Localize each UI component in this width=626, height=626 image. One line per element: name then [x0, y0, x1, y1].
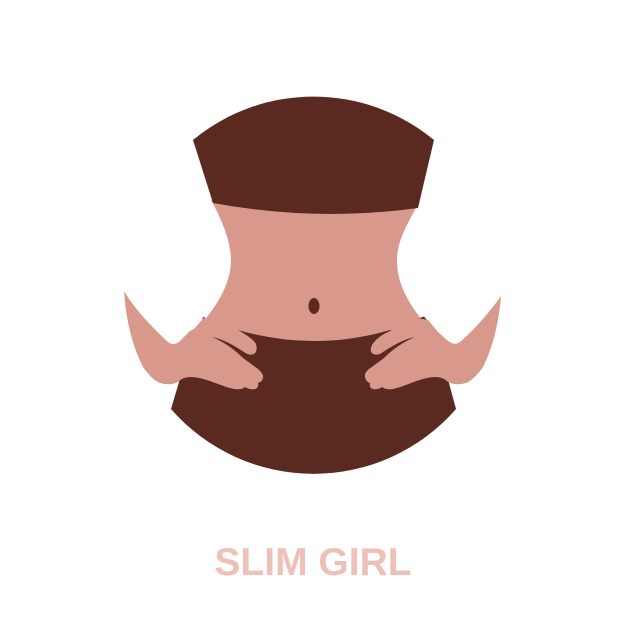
icon: right hand [365, 296, 501, 389]
icon: waist skin [203, 200, 422, 345]
icon: navel [308, 298, 320, 314]
icon: left hand [124, 291, 263, 389]
icon: crop top [193, 97, 434, 214]
title: SLIM GIRL [214, 541, 412, 584]
icon: skirt [171, 316, 456, 474]
